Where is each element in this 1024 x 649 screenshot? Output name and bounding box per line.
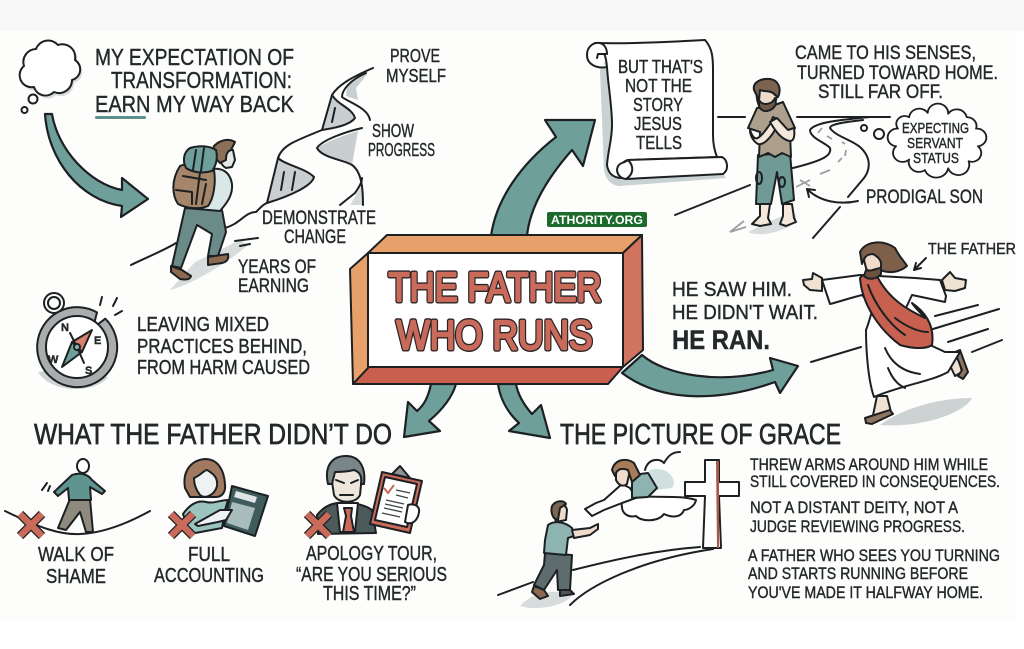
illustration: prodigal son bbox=[748, 79, 796, 234]
label: FULL bbox=[188, 544, 230, 566]
label: demonstrate change: CHANGE bbox=[284, 227, 346, 248]
label: THIS TIME?” bbox=[323, 583, 416, 605]
scroll text: TELLS bbox=[636, 132, 682, 153]
illustration: winding mountain road bbox=[225, 68, 373, 228]
label: years of earning bbox=[238, 257, 316, 297]
label: the father with arrow: THE FATHER bbox=[928, 241, 1016, 258]
heavenly figure bbox=[585, 484, 636, 516]
arrow: up to scroll bbox=[491, 120, 595, 236]
label: years of earning: YEARS OF bbox=[238, 257, 316, 278]
label: the father with arrow bbox=[914, 241, 1016, 270]
label bbox=[154, 544, 264, 587]
watermark badge: ATHORITY.ORG bbox=[551, 213, 643, 227]
icon: red x bbox=[307, 514, 329, 536]
arrow: down left to heading bbox=[404, 384, 456, 437]
label: demonstrate change bbox=[262, 208, 376, 248]
text: he saw him: HE SAW HIM. bbox=[672, 279, 792, 301]
scroll text: STORY bbox=[633, 94, 683, 115]
label: show progress: SHOW bbox=[372, 121, 414, 141]
scroll text bbox=[618, 56, 703, 153]
central title box bbox=[350, 235, 643, 384]
label: prove myself bbox=[386, 46, 446, 86]
label: demonstrate change: DEMONSTRATE bbox=[262, 208, 376, 229]
icon: compass: E bbox=[94, 335, 101, 347]
label: years of earning: EARNING bbox=[238, 276, 309, 297]
bubble text: SERVANT bbox=[907, 136, 963, 152]
icon: stern man with clipboard bbox=[317, 456, 422, 534]
text: came to his senses: STILL FAR OFF. bbox=[818, 81, 943, 103]
thought bubble: expecting servant status bbox=[861, 104, 986, 178]
text: came to his senses: CAME TO HIS SENSES, bbox=[795, 42, 976, 64]
text: the picture of grace explanation: AND STARTS RUNNING BEFORE bbox=[748, 564, 968, 583]
title: THE FATHER bbox=[388, 264, 602, 310]
illustration: picture of grace bbox=[498, 452, 739, 608]
label: WALK OF bbox=[38, 544, 114, 566]
text: leaving mixed practices bbox=[137, 314, 310, 379]
scroll bbox=[587, 40, 727, 186]
item: apology tour bbox=[296, 456, 447, 605]
heading: the picture of grace: THE PICTURE OF GRACE bbox=[560, 419, 841, 451]
label: “ARE YOU SERIOUS bbox=[296, 564, 447, 586]
heading: expectation bbox=[95, 44, 295, 119]
arrow: thought to hiker bbox=[45, 114, 148, 217]
icon: compass: S bbox=[85, 365, 92, 377]
icon: compass: W bbox=[48, 354, 59, 366]
label: APOLOGY TOUR, bbox=[306, 543, 437, 565]
text: leaving mixed practices: FROM HARM CAUSED bbox=[137, 357, 310, 379]
title: WHO RUNS bbox=[396, 312, 592, 358]
bubble text: STATUS bbox=[913, 151, 959, 167]
label: prodigal son with arrow: PRODIGAL SON bbox=[866, 187, 983, 208]
title bbox=[388, 264, 602, 358]
label: show progress bbox=[368, 121, 435, 160]
heading: expectation: TRANSFORMATION: bbox=[111, 67, 292, 93]
item: full accounting bbox=[154, 459, 268, 587]
text: the picture of grace explanation: NOT A DISTANT DEITY, NOT A bbox=[750, 498, 959, 517]
icon: red x bbox=[20, 514, 42, 536]
label: SHAME bbox=[46, 566, 106, 588]
icon: walker on rope bbox=[5, 459, 150, 534]
text: he saw him: HE RAN. bbox=[672, 325, 770, 355]
arrow: down right to heading bbox=[498, 384, 550, 438]
arrow: right to the father bbox=[622, 355, 798, 396]
man reaching bbox=[534, 553, 572, 590]
text: he saw him: HE DIDN'T WAIT. bbox=[672, 302, 818, 324]
icon: compass bbox=[37, 293, 122, 389]
text: the picture of grace explanation: YOU'VE MADE IT HALFWAY HOME. bbox=[748, 583, 983, 602]
heading: expectation: MY EXPECTATION OF bbox=[95, 44, 294, 70]
icon: woman with calculator bbox=[183, 459, 268, 536]
bubble text bbox=[902, 121, 969, 167]
title: WHO RUNS bbox=[396, 312, 592, 358]
heading: what the father didn't do: WHAT THE FATHER DIDN’T DO bbox=[34, 419, 392, 451]
label bbox=[38, 544, 114, 588]
icon: thought cloud bbox=[20, 41, 82, 113]
label bbox=[296, 543, 447, 605]
bubble text: EXPECTING bbox=[902, 121, 969, 137]
scroll text: BUT THAT'S bbox=[618, 56, 703, 77]
illustration: road home bbox=[675, 117, 890, 238]
title: THE FATHER bbox=[388, 264, 602, 310]
label: prodigal son with arrow bbox=[807, 187, 983, 208]
cloud bbox=[640, 469, 674, 492]
cross bbox=[685, 460, 739, 548]
icon: red x bbox=[171, 514, 193, 536]
heading: expectation: EARN MY WAY BACK bbox=[95, 91, 295, 117]
item: walk of shame bbox=[5, 459, 150, 588]
label: show progress: PROGRESS bbox=[368, 140, 435, 160]
label: prove myself: MYSELF bbox=[386, 66, 446, 86]
text: leaving mixed practices: LEAVING MIXED bbox=[137, 314, 269, 336]
illustration: the father running bbox=[803, 242, 1002, 425]
text: the picture of grace explanation: JUDGE REVIEWING PROGRESS. bbox=[750, 517, 965, 536]
icon: compass: N bbox=[61, 322, 69, 334]
text: the picture of grace explanation bbox=[748, 455, 1000, 602]
text: leaving mixed practices: PRACTICES BEHIND, bbox=[137, 336, 307, 358]
text: came to his senses bbox=[795, 42, 998, 103]
scroll text: NOT THE bbox=[625, 75, 692, 96]
illustration: hiker with backpack bbox=[131, 140, 258, 290]
label: ACCOUNTING bbox=[154, 565, 264, 587]
scroll text: JESUS bbox=[634, 113, 682, 134]
label: prove myself: PROVE bbox=[390, 46, 440, 66]
text: he saw him bbox=[672, 279, 818, 355]
